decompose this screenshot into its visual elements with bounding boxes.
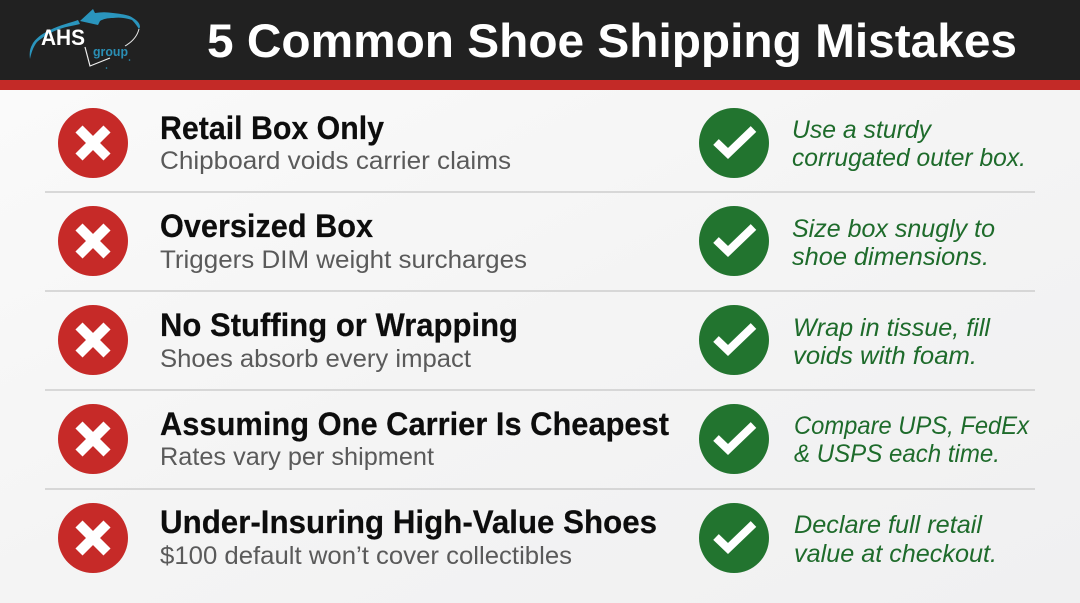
title: 5 Common Shoe Shipping Mistakes xyxy=(207,14,1017,67)
fix text: Size box snugly to xyxy=(792,215,995,243)
fix text xyxy=(794,412,1030,468)
fix text: Wrap in tissue, fill xyxy=(793,314,991,342)
row 5 xyxy=(58,503,997,573)
mistake heading: Oversized Box xyxy=(160,208,373,244)
icon: red cross xyxy=(58,305,128,375)
logo: AHS group: AHS xyxy=(41,25,85,50)
logo: AHS group xyxy=(30,9,140,69)
fix text: Compare UPS, FedEx xyxy=(794,412,1030,440)
row 4 xyxy=(58,404,1030,474)
icon: red cross xyxy=(58,108,128,178)
fix text: Use a sturdy xyxy=(792,116,932,144)
icon: red cross xyxy=(58,206,128,276)
mistake detail: Triggers DIM weight surcharges xyxy=(160,246,527,274)
row 3 xyxy=(58,305,991,375)
header band xyxy=(0,0,1080,90)
icon: green check xyxy=(699,108,769,178)
mistake detail: Rates vary per shipment xyxy=(160,443,434,471)
icon: green check xyxy=(699,206,769,276)
icon: green check xyxy=(699,404,769,474)
icon: red cross xyxy=(58,404,128,474)
logo: AHS group: group xyxy=(93,44,128,59)
fix text xyxy=(794,511,997,568)
row 2 xyxy=(58,206,995,276)
mistake heading: Under-Insuring High-Value Shoes xyxy=(160,504,657,540)
mistake detail: Chipboard voids carrier claims xyxy=(160,147,511,175)
fix text: & USPS each time. xyxy=(794,440,1000,468)
fix text xyxy=(792,215,995,271)
icon: green check xyxy=(699,305,769,375)
fix text: voids with foam. xyxy=(793,342,977,370)
mistake heading: Assuming One Carrier Is Cheapest xyxy=(160,406,669,442)
divider lines xyxy=(45,192,1035,489)
fix text: corrugated outer box. xyxy=(792,144,1026,172)
mistake detail: Shoes absorb every impact xyxy=(160,345,471,373)
fix text: value at checkout. xyxy=(794,540,997,568)
fix text: shoe dimensions. xyxy=(792,243,989,271)
mistake detail: $100 default won’t cover collectibles xyxy=(160,542,572,570)
icon: green check xyxy=(699,503,769,573)
fix text: Declare full retail xyxy=(794,511,983,539)
fix text xyxy=(792,116,1026,172)
mistake heading: Retail Box Only xyxy=(160,110,384,146)
fix text xyxy=(793,314,991,370)
icon: red cross xyxy=(58,503,128,573)
mistake heading: No Stuffing or Wrapping xyxy=(160,307,518,343)
row 1 xyxy=(58,108,1026,178)
